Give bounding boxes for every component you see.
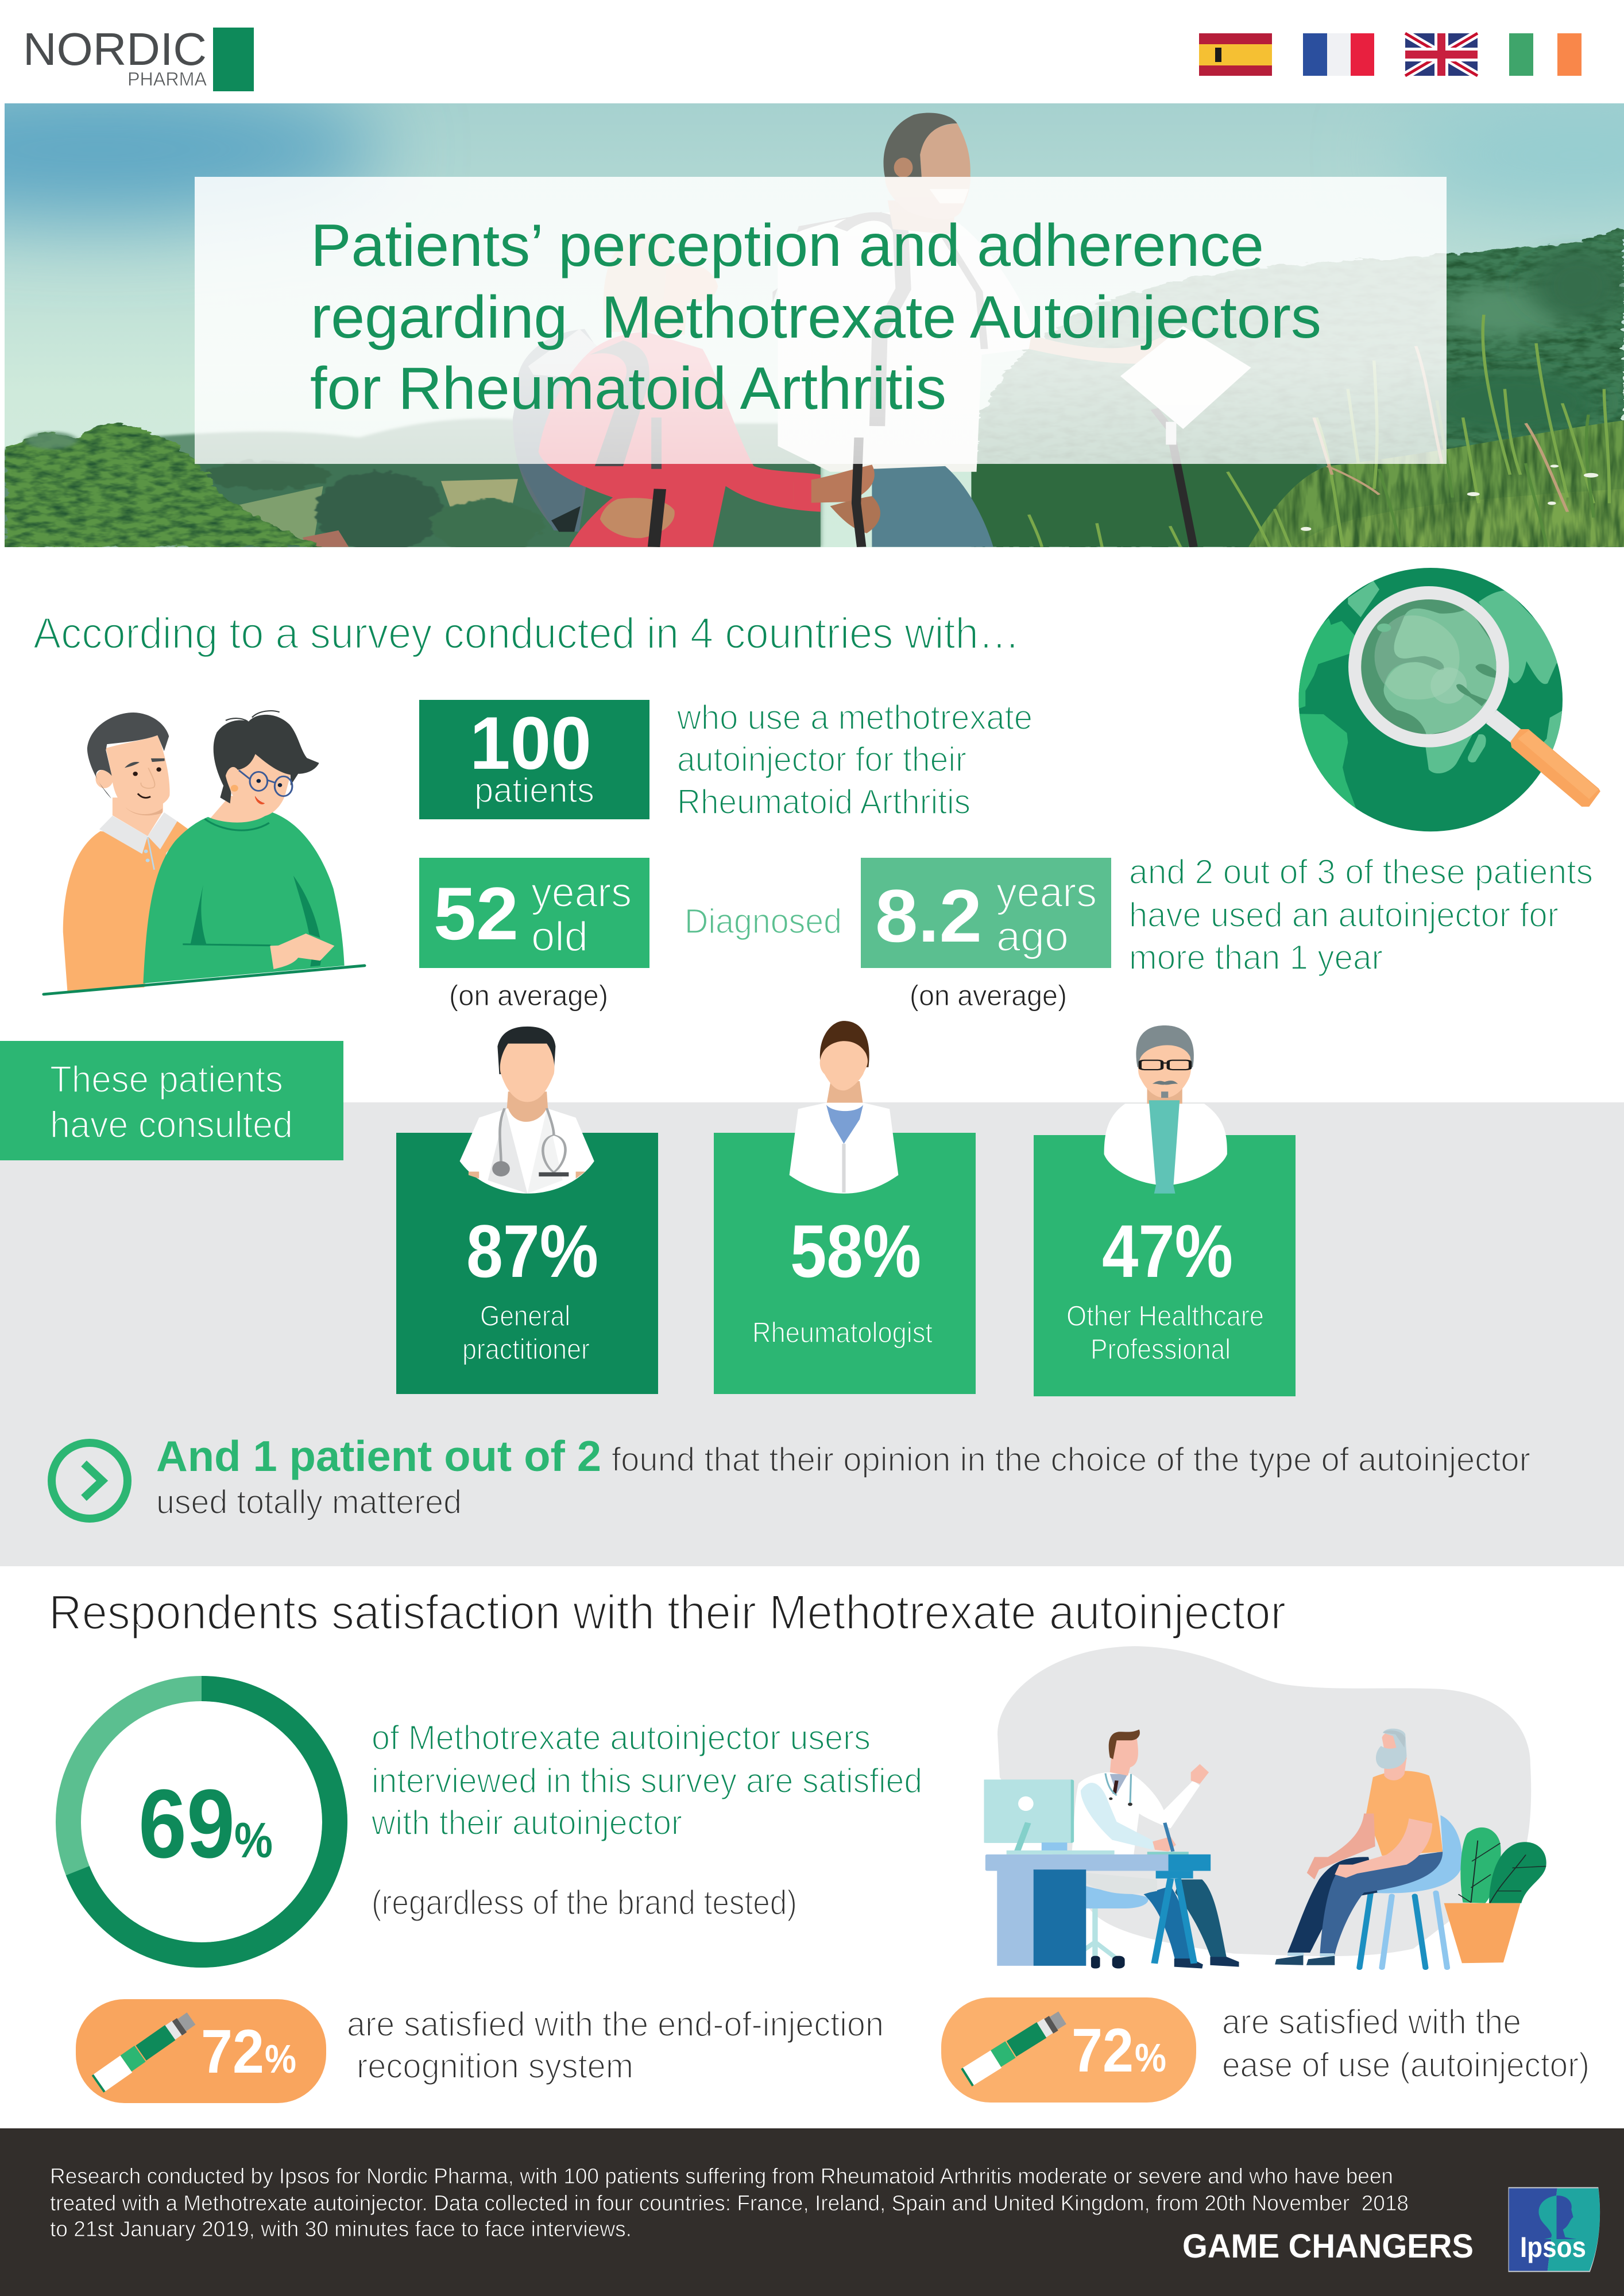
footer panel — [0, 2128, 1624, 2296]
hero photo: couple hiking in the countryside — [0, 80, 1624, 552]
notes: on average: (on average) — [910, 979, 1067, 1012]
card: general practitioner 87%: General — [480, 1300, 570, 1332]
stat box: 8.2 years ago: years — [996, 870, 1097, 916]
card: rheumatologist 58%: Rheumatologist — [752, 1317, 933, 1349]
logo: Ipsos — [1508, 2187, 1600, 2272]
icon: autoinjector pen — [961, 2009, 1068, 2086]
stat box: 8.2 years ago: ago — [996, 914, 1069, 960]
pill: 72% end-of-injection recognition: 72 — [201, 2016, 264, 2086]
pill: 72% ease of use: % — [1135, 2035, 1166, 2080]
flag: Spain — [1199, 33, 1272, 76]
card: other healthcare professional 47% — [1034, 1135, 1296, 1396]
doctor: general practitioner — [460, 1027, 594, 1194]
stat box: 52 years old: 52 — [434, 872, 519, 955]
title: Patients’ perception and adherence — [311, 212, 1264, 279]
footer: game changers: GAME CHANGERS — [1182, 2228, 1474, 2265]
magnifier handle — [1486, 710, 1522, 742]
hero right side: forest, man and grass — [772, 113, 1624, 547]
donut chart: 69%: 69 — [138, 1770, 235, 1879]
intro heading: According to a survey conducted in 4 countries with… — [33, 609, 1020, 658]
text: end-of-injection recognition system — [347, 2005, 884, 2085]
callout: 1 patient out of 2: found that their opinion in the choice of the type of autoinjector — [612, 1441, 1530, 1478]
label: These patients have consulted: These patients — [50, 1058, 283, 1100]
background blob — [997, 1646, 1531, 1956]
woman's backpack — [513, 329, 593, 526]
text: 2 out of 3 patients: and 2 out of 3 of these patients — [1129, 853, 1593, 891]
pill: 72% ease of use — [941, 1997, 1196, 2103]
patient — [1275, 1729, 1462, 1968]
text: ease of use: are satisfied with the — [1222, 2003, 1521, 2041]
doctor: rheumatologist — [790, 1021, 898, 1194]
card: general practitioner 87% — [396, 1133, 658, 1394]
woman's hand on the pole — [600, 498, 675, 538]
icon: globe with magnifying glass — [1295, 568, 1600, 831]
text: satisfaction description: (regardless of the brand tested) — [372, 1883, 797, 1922]
callout: 1 patient out of 2 — [156, 1432, 1530, 1521]
logo: Nordic Pharma: NORDIC — [23, 24, 207, 75]
woman in green sweater — [143, 711, 345, 984]
text: end-of-injection recognition system: recognition system — [357, 2047, 633, 2085]
man's head — [888, 200, 956, 235]
text: who use a methotrexate autoinjector: who use a methotrexate — [676, 698, 1033, 737]
text: satisfaction description — [371, 1718, 922, 1922]
text: 2 out of 3 patients — [1129, 853, 1593, 977]
logo: Nordic Pharma: PHARMA — [127, 68, 207, 90]
notes: on average — [449, 979, 1067, 1012]
logo: Nordic Pharma — [23, 24, 254, 91]
grey panel: consultations — [0, 1102, 1624, 1566]
title: regarding Methotrexate Autoinjectors — [311, 284, 1321, 351]
doctor — [1072, 1729, 1239, 1968]
icon: autoinjector pen — [92, 2010, 197, 2093]
card: other healthcare professional 47%: Other Healthcare — [1066, 1300, 1264, 1332]
stat box: 100 patients: patients — [474, 771, 594, 810]
flag: United Kingdom — [1405, 33, 1478, 76]
stat box: 52 years old: old — [531, 914, 588, 960]
pill: 72% end-of-injection recognition — [76, 1999, 326, 2103]
ledge line — [44, 966, 365, 994]
callout: 1 patient out of 2: And 1 patient out of 2 — [156, 1432, 601, 1480]
label: These patients have consulted: have consulted — [50, 1104, 293, 1145]
heading: respondents satisfaction: Respondents satisfaction with their Methotrexate autoinjector — [49, 1585, 1286, 1639]
tall grass — [1248, 420, 1624, 547]
text: 2 out of 3 patients: have used an autoinjector for — [1129, 896, 1559, 934]
flag: Ireland — [1509, 33, 1582, 76]
illustration: doctor and patient consultation — [984, 1646, 1546, 1968]
text: who use a methotrexate autoinjector: autoinjector for their — [677, 740, 966, 779]
icons: country flags — [1199, 33, 1582, 76]
stat box: 8.2 years ago — [861, 858, 1111, 968]
illustration: couple of patients — [44, 711, 365, 994]
text: end-of-injection recognition system: are satisfied with the end-of-injection — [347, 2005, 884, 2043]
footer: research note: treated with a Methotrexate autoinjector. Data collected in four countries: France, Ireland, Spain and United Kingdom, from 20th November 2018 — [50, 2192, 1409, 2216]
man's backpack straps behind shirt — [772, 212, 883, 303]
text: ease of use — [1222, 2003, 1590, 2084]
title: for Rheumatoid Arthritis — [310, 355, 946, 422]
magnifier ring — [1348, 586, 1509, 748]
text: who use a methotrexate autoinjector: Rheumatoid Arthritis — [677, 783, 970, 821]
pill: 72% end-of-injection recognition: % — [265, 2036, 296, 2081]
man's shirt — [778, 212, 1034, 472]
card: rheumatologist 58% — [714, 1133, 976, 1394]
woman's hair and face — [604, 233, 677, 332]
man in orange sweater — [63, 713, 188, 992]
stat box: 52 years old — [419, 858, 649, 968]
donut chart: 69%: % — [234, 1813, 273, 1868]
desk and monitor — [984, 1780, 1211, 1966]
label: These patients have consulted — [0, 1041, 343, 1160]
pill: 72% ease of use: 72 — [1072, 2015, 1134, 2085]
text: who use a methotrexate autoinjector — [676, 698, 1033, 821]
man's jeans and hands — [872, 466, 993, 547]
flag: France — [1303, 33, 1374, 76]
notes: on average: (on average) — [449, 979, 608, 1012]
stat box: 100 patients — [419, 700, 649, 819]
footer: research note: Research conducted by Ipsos for Nordic Pharma, with 100 patients suffering from Rheumatoid Arthritis moderate or severe and who have been — [50, 2165, 1393, 2189]
hero left side: trees and fields — [0, 233, 821, 552]
card: rheumatologist 58%: 58% — [790, 1209, 921, 1293]
footer: research note — [50, 2165, 1409, 2241]
stat box: 100 patients: 100 — [470, 701, 591, 785]
man's arm and map — [1029, 335, 1181, 364]
card: general practitioner 87%: practitioner — [462, 1333, 590, 1365]
woman's jacket — [539, 332, 821, 547]
text: 2 out of 3 patients: more than 1 year — [1129, 938, 1383, 977]
text: satisfaction description: of Methotrexate autoinjector users — [372, 1718, 871, 1757]
icon: chevron in circle — [52, 1443, 127, 1519]
doctor: other healthcare professional — [1104, 1025, 1227, 1194]
card: other healthcare professional 47%: 47% — [1102, 1209, 1233, 1293]
donut chart: 69% — [68, 1689, 335, 1955]
stat box: 52 years old: years — [531, 870, 632, 916]
plant — [1444, 1827, 1546, 1963]
text: satisfaction description: with their autoinjector — [371, 1803, 682, 1842]
callout: 1 patient out of 2: used totally mattered — [156, 1484, 462, 1521]
title — [310, 212, 1321, 422]
logo: Ipsos: Ipsos — [1520, 2231, 1586, 2263]
card: other healthcare professional 47%: Professional — [1091, 1333, 1231, 1365]
stat box: 8.2 years ago: 8.2 — [875, 874, 982, 958]
label: Diagnosed: Diagnosed — [685, 902, 842, 940]
translucent title panel — [195, 177, 1447, 464]
icons: three doctors — [460, 1021, 1227, 1194]
footer: research note: to 21st January 2019, with 30 minutes face to face interviews. — [50, 2217, 632, 2241]
text: ease of use: ease of use (autoinjector) — [1222, 2046, 1590, 2084]
card: general practitioner 87%: 87% — [466, 1209, 598, 1293]
text: satisfaction description: interviewed in this survey are satisfied — [372, 1761, 922, 1800]
